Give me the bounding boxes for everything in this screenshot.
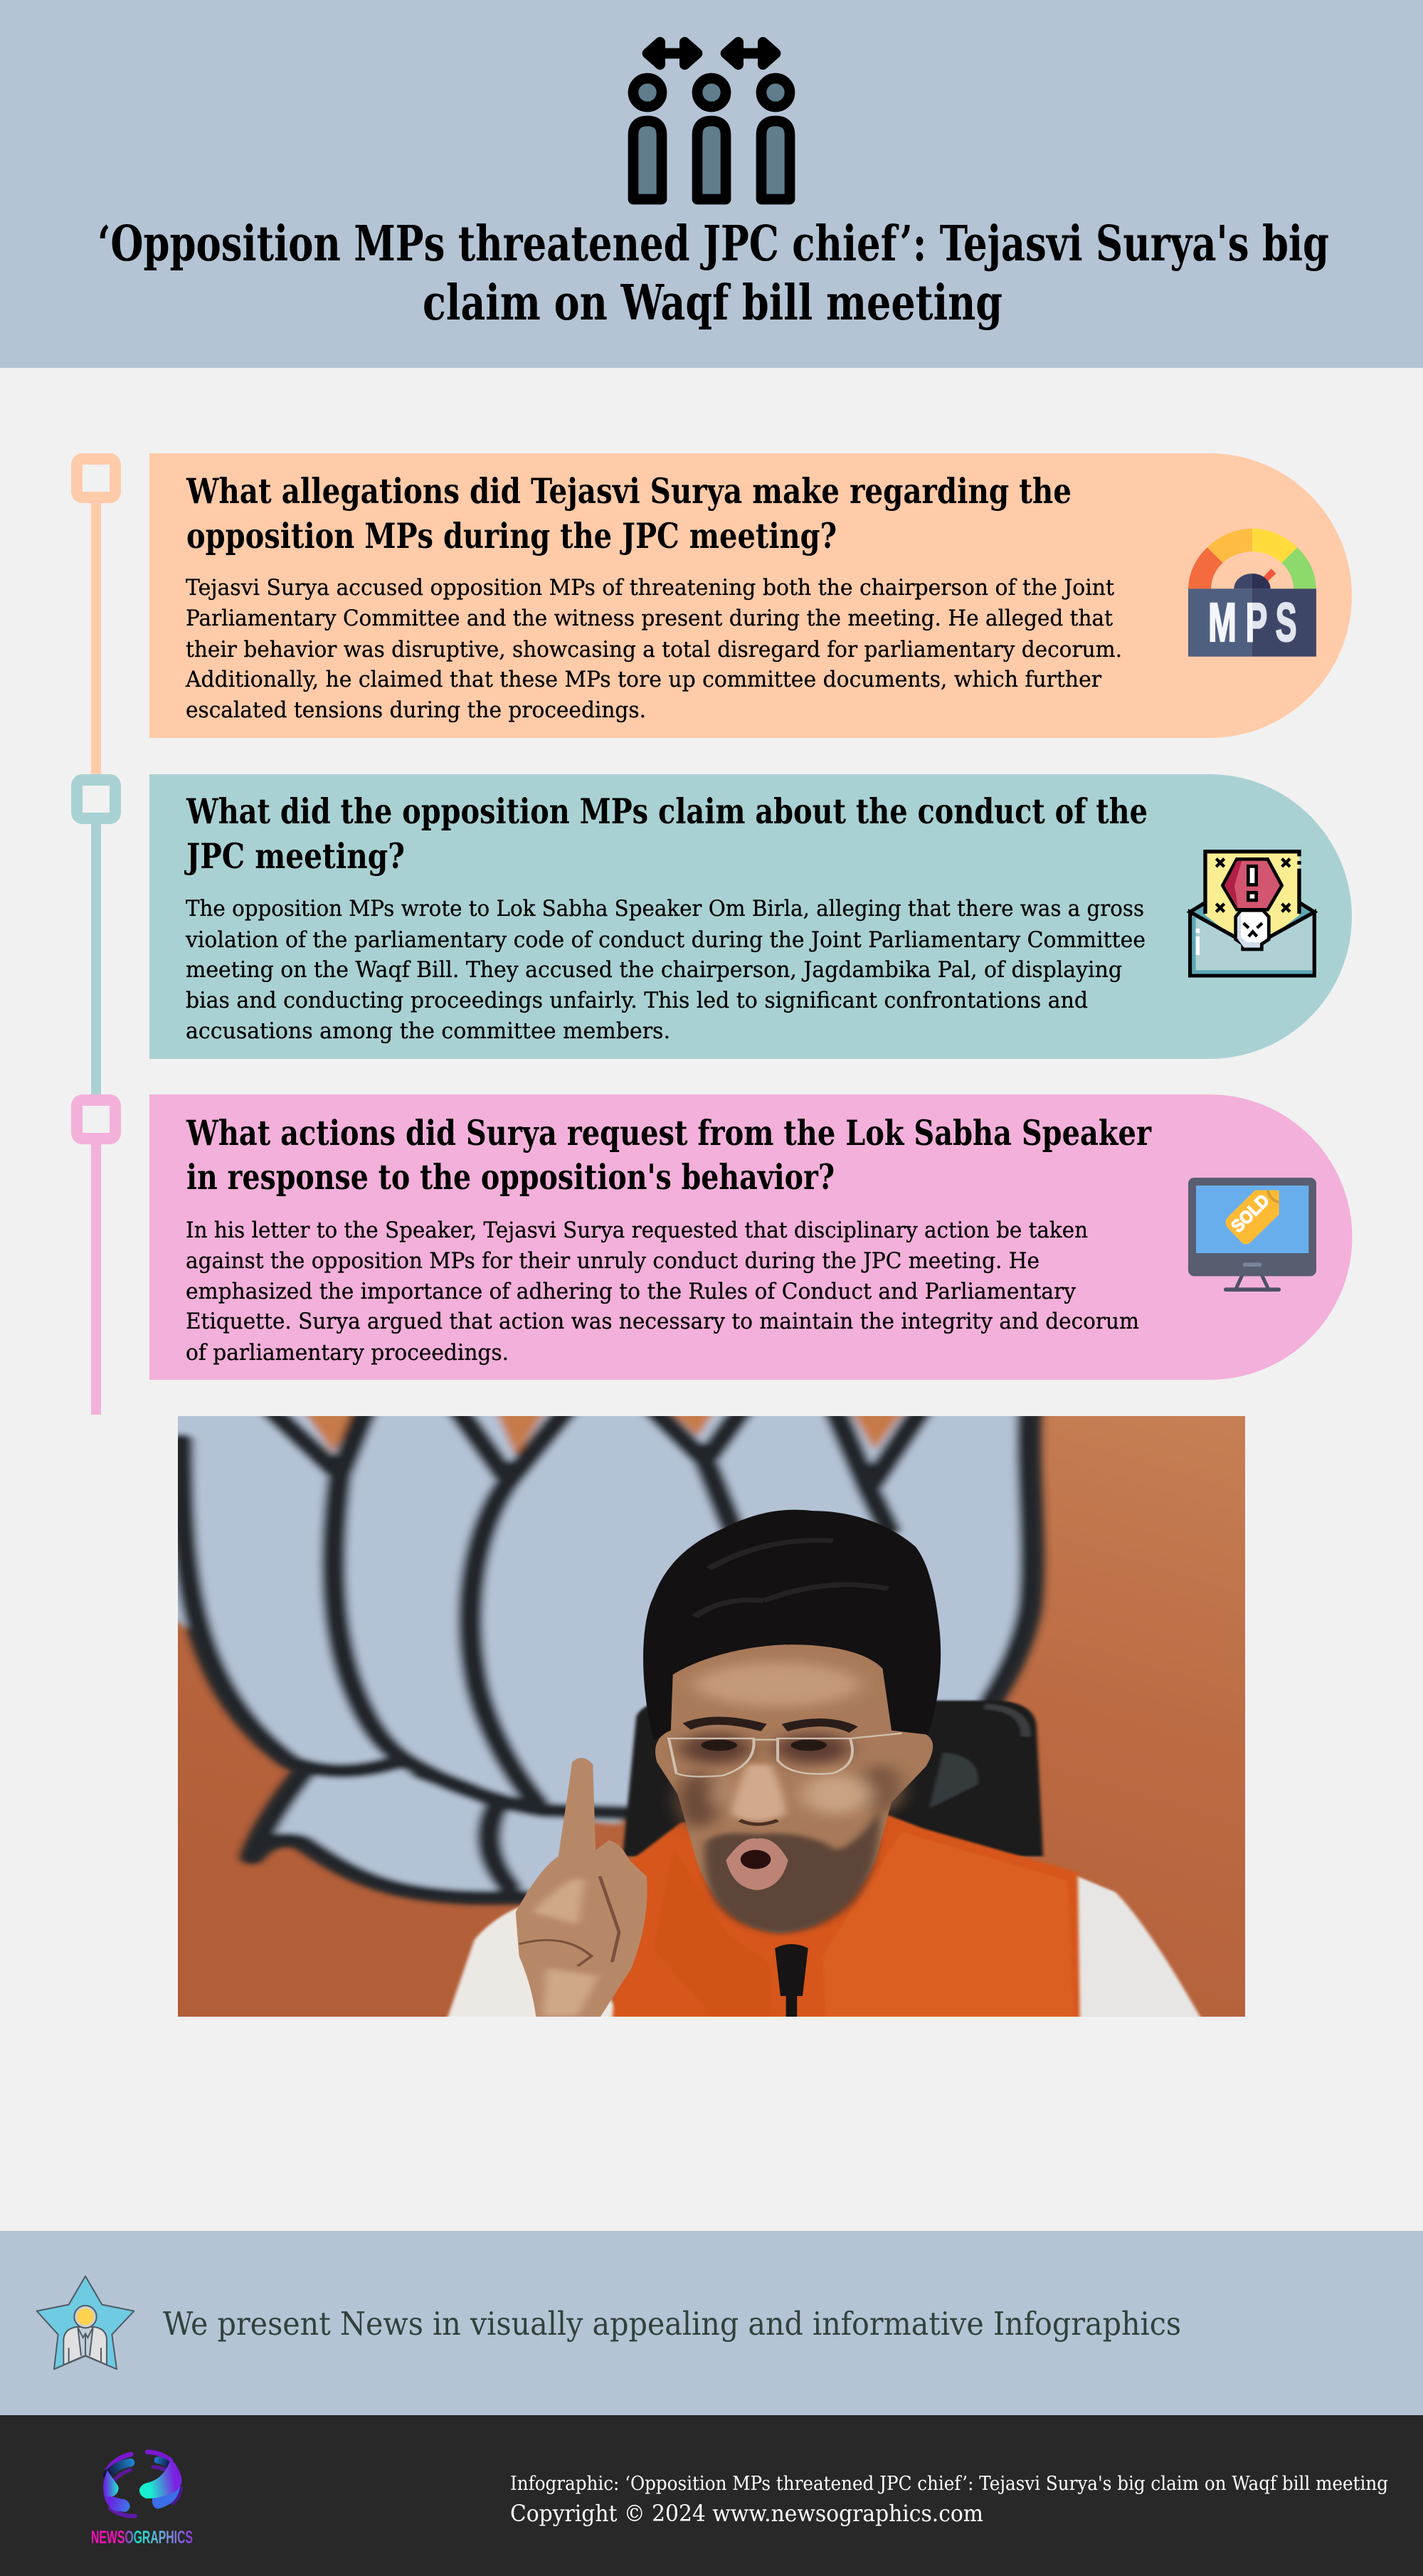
footer credit text [510,2473,1388,2527]
newsographics logo [91,2452,193,2548]
panel 1 body text [185,575,1122,723]
footer credit text: Copyright © 2024 www.newsographics.com [510,2500,983,2527]
panel: conduct claim [149,774,1352,1059]
panel 1 body text: escalated tensions during the proceedings. [186,697,646,723]
title [97,216,1329,332]
hair [643,1510,941,1741]
tagline text: We present News in visually appealing and informative Infographics [163,2305,1181,2343]
head [643,1510,941,1933]
panel 2 heading: JPC meeting? [184,835,405,877]
panel 3 body text: In his letter to the Speaker, Tejasvi Surya requested that disciplinary action be taken [186,1218,1088,1243]
panel 1 heading: What allegations did Tejasvi Surya make regarding the [186,470,1072,512]
beard [704,1808,880,1933]
panel 3 body text: emphasized the importance of adhering to the Rules of Conduct and Parliamentary [186,1279,1076,1304]
photo background [171,1409,1252,2035]
tagline band [0,2231,1423,2415]
photo: Tejasvi Surya speaking [171,1409,1252,2035]
mouth [726,1838,788,1890]
eyebrows and eyes [687,1721,854,1751]
panel 1 heading: opposition MPs during the JPC meeting? [186,515,837,556]
icon: MPS gauge: M [1208,592,1237,653]
panel 3 body text: Etiquette. Surya argued that action was necessary to maintain the integrity and decorum [186,1309,1139,1334]
logo wordmark: NEWSOGRAPHICS [91,2528,193,2548]
icon: MPS gauge: S [1276,592,1297,653]
panel: allegations [149,453,1352,738]
panel 2 body text: violation of the parliamentary code of conduct during the Joint Parliamentary Committee [185,927,1146,953]
panel 1 body text: Tejasvi Surya accused opposition MPs of threatening both the chairperson of the Joint [186,575,1115,601]
microphone [775,1944,808,2020]
panel 1 body text: Additionally, he claimed that these MPs tore up committee documents, which further [185,667,1101,692]
icon: star with businessman [37,2276,134,2369]
panel 3 heading [186,1112,1152,1198]
panel 1 body text: their behavior was disruptive, showcasing a total disregard for parliamentary decorum. [186,637,1122,663]
panel 3 heading: What actions did Surya request from the Lok Sabha Speaker [186,1112,1152,1154]
panel 3 body text: against the opposition MPs for their unruly conduct during the JPC meeting. He [186,1248,1040,1274]
icon: MPS gauge: P [1246,592,1267,653]
panel 3 body text [186,1218,1139,1366]
panel 3 body text: of parliamentary proceedings. [186,1340,509,1366]
panel 2 body text: meeting on the Waqf Bill. They accused the chairperson, Jagdambika Pal, of displaying [186,957,1122,983]
panel 2 body text: accusations among the committee members. [186,1018,670,1044]
panel 2 body text [185,896,1146,1044]
panel 1 heading [186,470,1072,556]
panel 2 heading: What did the opposition MPs claim about the conduct of the [186,791,1148,832]
nose [731,1764,786,1821]
icon: monitor with sold tag [1188,1178,1316,1292]
glasses [669,1733,902,1777]
panel 2 body text: The opposition MPs wrote to Lok Sabha Speaker Om Birla, alleging that there was a gross [186,896,1144,922]
panel 3 heading: in response to the opposition's behavior? [186,1156,835,1198]
footer [0,2415,1423,2576]
vest [612,1812,1080,2020]
timeline [77,459,115,1415]
title: claim on Waqf bill meeting [423,275,1003,332]
panel 1 body text: Parliamentary Committee and the witness present during the meeting. He alleged that [186,606,1113,631]
panel 2 body text: bias and conducting proceedings unfairly. This led to significant confrontations and [186,988,1088,1013]
panel 2 heading [184,791,1148,877]
chair [623,1701,1043,1857]
icon: MPS gauge [1188,529,1316,657]
icon: three people with arrows [633,42,790,199]
shirt [447,1872,1202,2020]
icon: threat letter envelope [1190,852,1314,976]
icon: monitor with sold tag: SOLD [1228,1191,1274,1237]
hand with raised finger [516,1758,647,2020]
face [655,1645,933,1933]
panel: requested actions [149,1094,1352,1380]
header band [0,0,1423,368]
